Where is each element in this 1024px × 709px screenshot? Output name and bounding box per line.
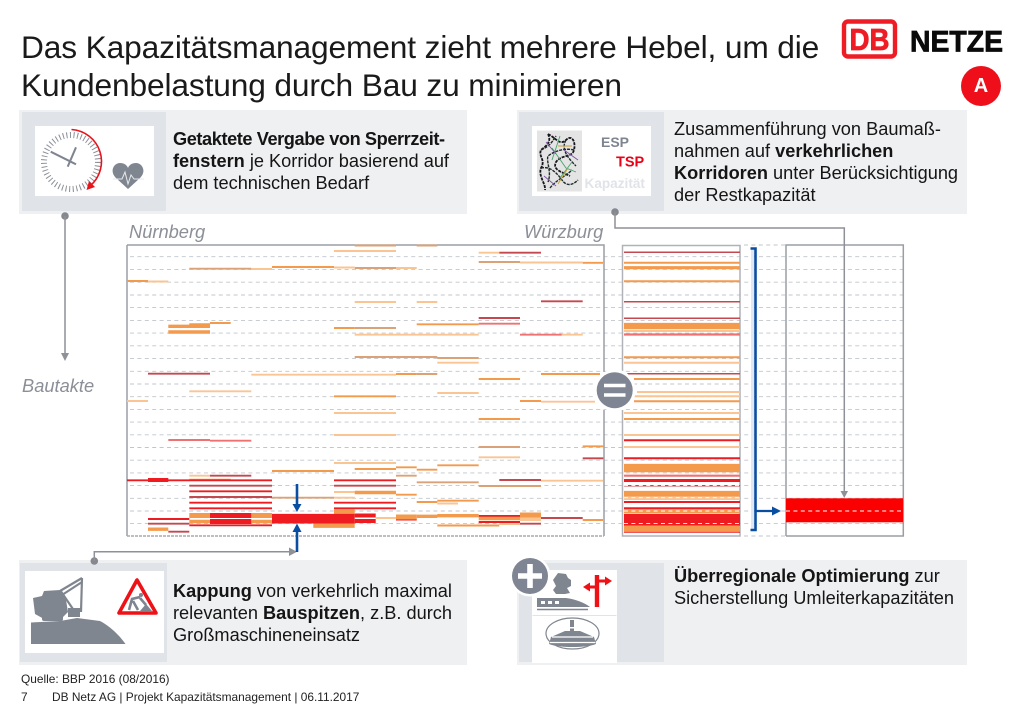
- panel image card: [35, 126, 154, 196]
- footer: project line: DB Netz AG | Projekt Kapazitätsmanagement | 06.11.2017: [52, 690, 359, 704]
- panel text: der Restkapazität: [674, 185, 816, 205]
- panel text: Zusammenführung von Baumaß-: [674, 119, 941, 139]
- panel image background: [519, 563, 664, 662]
- panel text: [173, 581, 452, 645]
- title: [21, 29, 819, 103]
- panel image background: [20, 563, 167, 662]
- result box: red block: [786, 498, 903, 522]
- panel text: nahmen auf verkehrlichen: [674, 141, 893, 161]
- orange and red bars: summed column: [624, 252, 740, 532]
- icon: network map with ESP TSP labels: Kapazität: [584, 176, 645, 191]
- panel: Zusammenführung: [517, 110, 967, 214]
- icon: network map with ESP TSP labels: [537, 130, 645, 192]
- icon: excavator and construction sign: [31, 577, 158, 644]
- panel text: Großmaschineneinsatz: [173, 625, 360, 645]
- title: Kundenbelastung durch Bau zu minimieren: [21, 67, 622, 103]
- panel text: fenstern je Korridor basierend auf: [173, 151, 449, 171]
- arrows: blue capping arrows: [292, 484, 302, 552]
- logo: DB Netze: [842, 19, 1003, 59]
- panel: Kappung: [19, 560, 467, 665]
- orange and red bars: Nürnberg to Würzburg: [127, 246, 603, 532]
- bracket and arrow: blue: [750, 248, 781, 530]
- panel text: dem technischen Bedarf: [173, 173, 369, 193]
- chart grid: [130, 245, 903, 536]
- panel text: Getaktete Vergabe von Sperrzeit-: [173, 129, 445, 149]
- footer: page number: 7: [21, 690, 28, 704]
- source note: Quelle: BBP 2016 (08/2016): [21, 672, 170, 686]
- panel text: [173, 129, 449, 193]
- panel: getaktete Vergabe: [19, 110, 467, 214]
- panel image card: [532, 126, 651, 196]
- arrow: Zusammenführung to result box: [611, 208, 848, 498]
- panel text: Korridoren unter Berücksichtigung: [674, 163, 958, 183]
- title: Das Kapazitätsmanagement zieht mehrere Hebel, um die: [21, 29, 819, 65]
- arrow: Kappung connector: [90, 548, 297, 565]
- panel text: [674, 566, 954, 608]
- arrow: Bautakte: [61, 212, 69, 361]
- panel image background: [22, 112, 166, 211]
- logo: DB Netze: NETZE: [910, 26, 1003, 58]
- icon: network map with ESP TSP labels: TSP: [616, 154, 645, 170]
- panel: Überregionale Optimierung: [517, 560, 967, 665]
- panel image card: [532, 570, 617, 663]
- label: Nürnberg: Nürnberg: [129, 221, 205, 242]
- badge A: A: [974, 75, 988, 97]
- chart frames: [127, 245, 903, 536]
- badge A: [961, 66, 1001, 106]
- panel text: Überregionale Optimierung zur: [674, 566, 940, 586]
- logo: DB Netze: DB: [850, 22, 890, 57]
- panel image background: [519, 112, 664, 211]
- icons: Germany, signpost, train, track: [512, 558, 616, 650]
- label: Würzburg: Würzburg: [524, 221, 603, 242]
- icon: clock and heart: [41, 128, 144, 192]
- panel text: Sicherstellung Umleiterkapazitäten: [674, 588, 954, 608]
- panel text: Kappung von verkehrlich maximal: [173, 581, 452, 601]
- panel text: relevanten Bauspitzen, z.B. durch: [173, 603, 452, 623]
- panel image card: [25, 571, 164, 653]
- icon: network map with ESP TSP labels: ESP: [601, 134, 629, 150]
- icon: equals sign: [594, 369, 636, 411]
- label: Bautakte: Bautakte: [22, 375, 94, 396]
- panel text: [674, 119, 958, 205]
